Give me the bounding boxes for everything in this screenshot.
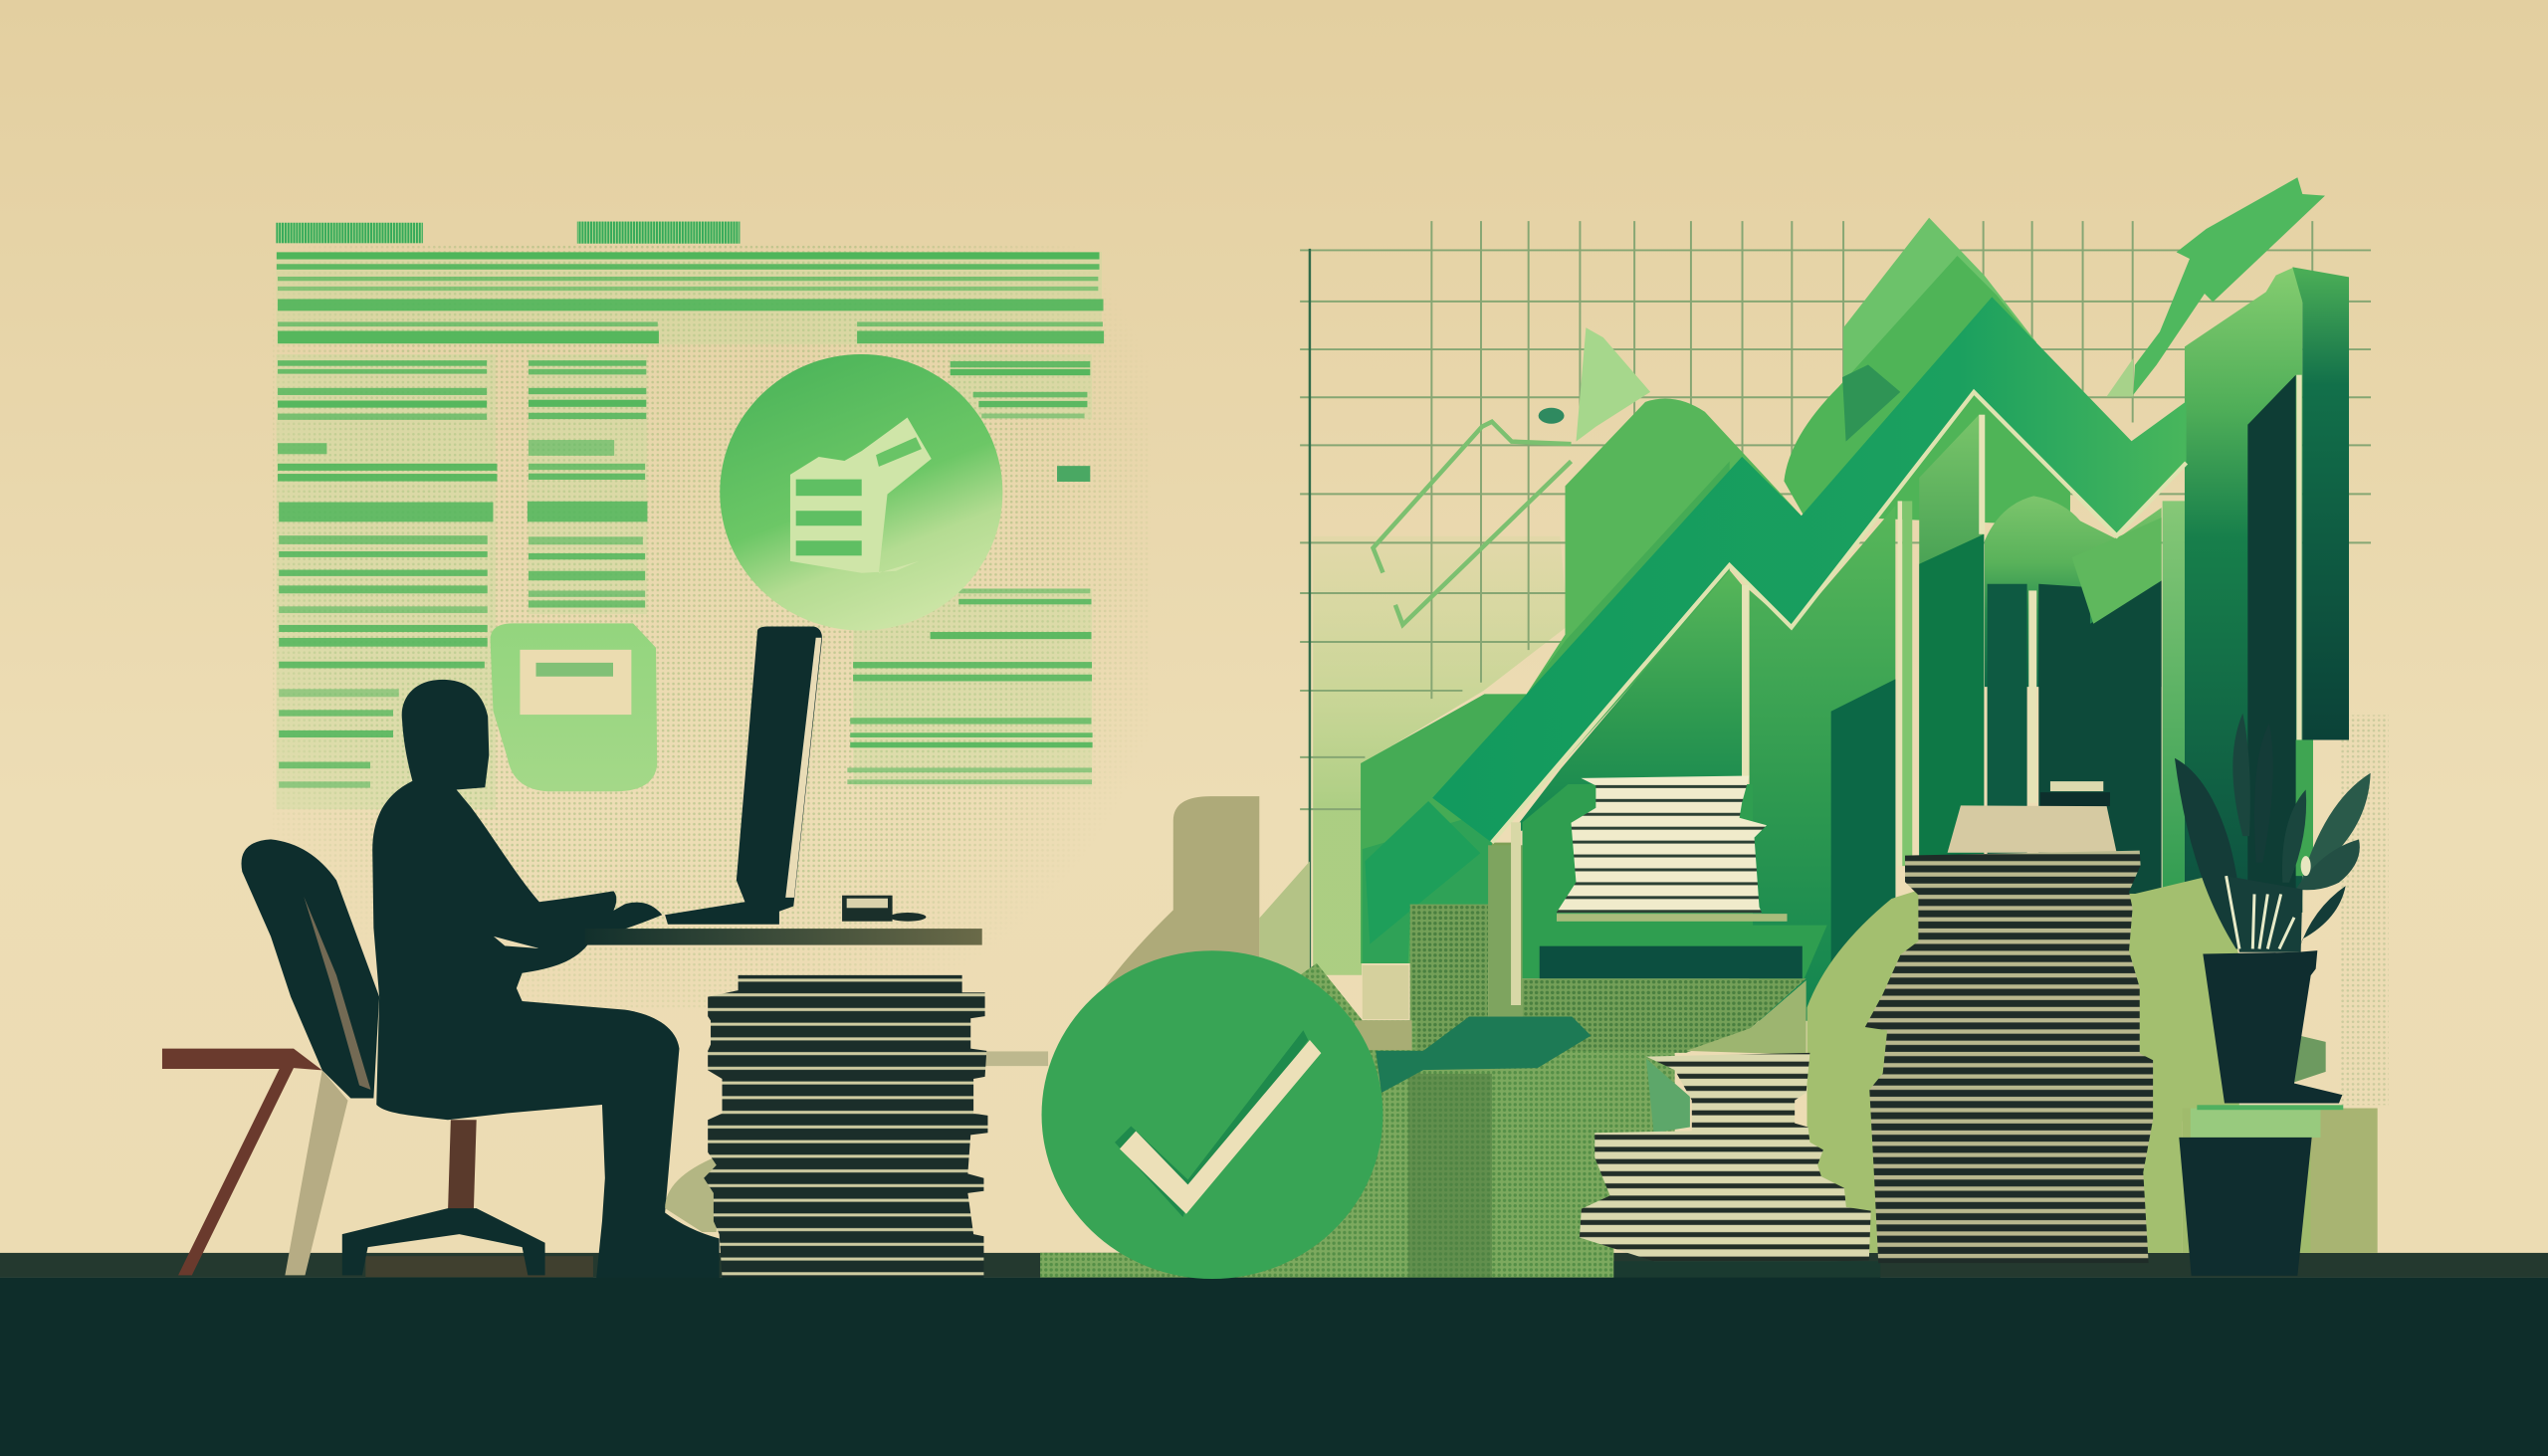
- tower dark face: [2247, 375, 2296, 913]
- plinth: [1613, 1261, 1880, 1278]
- thin outline arrows: [1374, 422, 1572, 625]
- lower green ground region: [983, 784, 2378, 1278]
- person silhouette: [372, 680, 720, 1278]
- pen holder: [842, 896, 926, 922]
- chart y axis: [1309, 249, 1311, 975]
- striped papers: [1580, 1053, 1871, 1266]
- desk worker scene: [162, 627, 987, 1278]
- olive block: [1355, 1020, 1412, 1050]
- upper pot: [2203, 950, 2342, 1104]
- dark base under note: [2040, 792, 2110, 806]
- halftone floor block: [1040, 963, 1675, 1278]
- chair base: [342, 1120, 545, 1275]
- floor: [0, 1253, 2548, 1456]
- dark shelf: [1540, 946, 1803, 978]
- thin shelf: [1557, 914, 1788, 922]
- plant bud: [2301, 856, 2311, 876]
- plant stand: [2183, 1105, 2378, 1253]
- halftone dots right of chart: [2340, 715, 2389, 1105]
- olive strip: [1488, 845, 1523, 1016]
- pale arrow shadow: [2107, 358, 2133, 396]
- zigzag growth arrow: [1365, 297, 2187, 944]
- cream strip: [1511, 822, 1521, 1005]
- big peak: [1843, 218, 2036, 427]
- green side of stack: [1646, 1059, 1690, 1133]
- chart grid: [1300, 221, 2371, 809]
- panel: growth chart: [1300, 177, 2389, 1105]
- check shadow: [1115, 1030, 1308, 1217]
- halftone tint at lower left of chart: [1313, 536, 1569, 975]
- right tower: [2185, 267, 2302, 913]
- tall paper stack: [1865, 781, 2153, 1263]
- pale green strip: [2296, 739, 2313, 876]
- olive rod: [983, 1051, 1048, 1066]
- monitor: [665, 627, 822, 925]
- document text lines: [276, 222, 1104, 788]
- second peak band: [1784, 256, 2070, 525]
- darker floor strip: [1408, 1074, 1492, 1278]
- wedge on dark columns: [2072, 518, 2162, 624]
- olive hill: [1807, 873, 2239, 1253]
- small note on top: [2050, 781, 2103, 791]
- column under second valley: [1750, 506, 1895, 1021]
- lower pot: [2179, 1138, 2312, 1276]
- paper stack on shelf: [1557, 775, 1767, 913]
- lower left mass: [1361, 462, 1730, 963]
- potted plant: [2175, 714, 2371, 1276]
- green blob: [1985, 496, 2162, 687]
- light green strip by separator: [1902, 501, 1912, 866]
- dark face of column: [1831, 679, 1895, 1021]
- dark facet: [1842, 365, 1900, 442]
- left mountain: [1527, 399, 1802, 694]
- desk top: [585, 929, 982, 945]
- olive strip: [1487, 843, 1512, 961]
- pale olive wedge: [1259, 861, 1310, 975]
- cream top of stack: [1948, 805, 2117, 853]
- arrowhead: [2133, 177, 2325, 395]
- chair back: [242, 839, 379, 1099]
- tower right pillar: [2292, 267, 2349, 739]
- small right stack: [1580, 1053, 1880, 1278]
- chair legs: [162, 1049, 348, 1275]
- chair back highlight: [304, 897, 370, 1090]
- shadowed halftone under shelf: [1523, 978, 1806, 1053]
- olive halftone block: [1410, 905, 1488, 1080]
- light column separators: [1898, 375, 2302, 866]
- pale wash behind text columns: [277, 252, 1102, 809]
- arm gap: [494, 936, 539, 948]
- paper stack under desk: [704, 975, 987, 1278]
- icon: green circle with bar stack: [720, 354, 1002, 631]
- column below first peak: [1919, 415, 1984, 913]
- halftone shading behind document: [273, 244, 1151, 1007]
- olive shape behind stack: [665, 1156, 717, 1232]
- green backdrop under arrow tail: [1363, 811, 1492, 963]
- striped stack body: [1865, 851, 2153, 1263]
- icon: green check badge: [1042, 950, 1382, 1279]
- dark center columns: [2038, 580, 2162, 913]
- mass under arrow: [1512, 570, 1742, 833]
- panel: report document: [273, 222, 1151, 1007]
- small teal chip: [1539, 408, 1565, 424]
- dark block in column: [1919, 534, 1984, 913]
- green shelf backdrop: [1523, 784, 1827, 978]
- icon: green badge card: [491, 623, 657, 791]
- plant stems: [2227, 876, 2294, 948]
- cream column lines: [1512, 417, 1985, 971]
- bright strip: [2163, 501, 2185, 913]
- pale square: [1363, 965, 1408, 1019]
- leaf cube beside pot: [2291, 1035, 2326, 1084]
- teal shadow blob: [1376, 1016, 1591, 1093]
- pale olive wedge: [1686, 980, 1806, 1055]
- small light peak: [1576, 327, 1650, 442]
- olive shadow shape: [1048, 796, 1259, 1138]
- check mark: [1120, 1040, 1321, 1214]
- plant leaves: [2175, 714, 2371, 952]
